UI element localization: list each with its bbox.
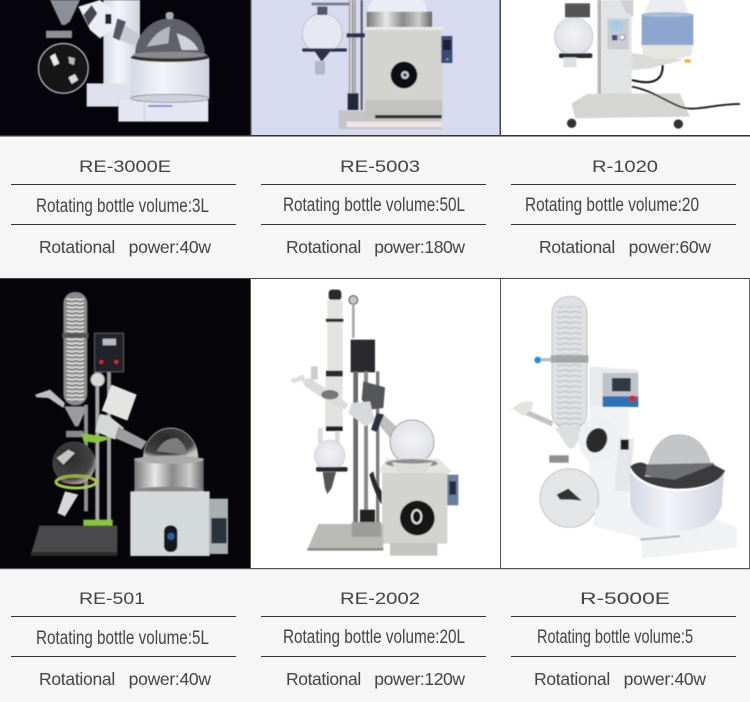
rotational power: Rotational power:120w xyxy=(286,669,465,689)
model name: RE-501 xyxy=(79,589,145,608)
card: RE-501 specs xyxy=(11,589,236,689)
card: RE-5003 specs xyxy=(261,157,486,257)
model name: R-5000E xyxy=(580,589,670,608)
photo frame bottom row xyxy=(0,278,750,569)
model name: RE-5003 xyxy=(340,157,420,176)
card: RE-3000E specs xyxy=(11,157,236,257)
rotational power: Rotational power:60w xyxy=(539,237,711,257)
bottle volume: Rotating bottle volume:3L xyxy=(36,196,209,217)
model name: R-1020 xyxy=(592,157,658,176)
rotational power: Rotational power:180w xyxy=(286,237,465,257)
model name: RE-3000E xyxy=(79,157,171,176)
product photo: RE-5003 rotary evaporator xyxy=(250,0,500,136)
card: R-5000E specs xyxy=(511,589,736,689)
rotational power: Rotational power:40w xyxy=(39,237,211,257)
bottle volume: Rotating bottle volume:20 xyxy=(525,195,699,216)
bottle volume: Rotating bottle volume:20L xyxy=(283,627,465,648)
bottle volume: Rotating bottle volume:50L xyxy=(283,195,465,216)
rotational power: Rotational power:40w xyxy=(39,669,211,689)
product photo: RE-501 rotary evaporator xyxy=(0,278,250,569)
bottle volume: Rotating bottle volume:5 xyxy=(537,627,693,648)
product photo: RE-3000E rotary evaporator xyxy=(0,0,250,136)
product photo: R-1020 rotary evaporator xyxy=(500,0,750,136)
model name: RE-2002 xyxy=(340,589,420,608)
product photo: R-5000E rotary evaporator xyxy=(500,278,750,569)
card: R-1020 specs xyxy=(511,157,736,257)
photo frame top row xyxy=(0,0,750,136)
rotational power: Rotational power:40w xyxy=(534,669,706,689)
card: RE-2002 specs xyxy=(261,589,486,689)
bottle volume: Rotating bottle volume:5L xyxy=(36,628,209,649)
product photo: RE-2002 rotary evaporator xyxy=(250,278,500,569)
